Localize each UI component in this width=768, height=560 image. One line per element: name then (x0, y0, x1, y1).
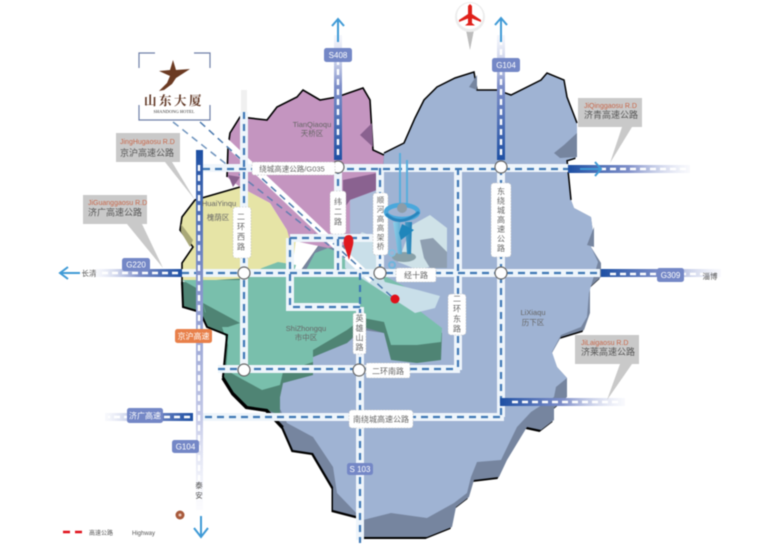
badge: Jiguang expressway (127, 408, 163, 423)
callout: Jiqing: JiQinggaosu R.D (584, 103, 637, 110)
Shizhong outline (182, 282, 283, 427)
Huaiyin shaded corner (181, 224, 193, 247)
callout: Jinghu: JingHugaosu R.D (120, 139, 175, 146)
highway: G309 east (601, 269, 721, 277)
callout: Jiqing: 济青高速公路 (584, 109, 638, 120)
logo: Shandong Hotel (139, 53, 210, 120)
district label: Tianqiao: 天桥区 (301, 128, 324, 138)
Lixia shaded corners (469, 75, 594, 247)
legend (63, 529, 155, 537)
district map (180, 72, 601, 539)
callout: Jinghu: 京沪高速公路 (120, 147, 174, 158)
badge: S408 (324, 48, 352, 62)
road label: Wei 2 Road: 纬二路 (334, 197, 342, 228)
highway: G104 north (497, 35, 505, 160)
district: Lixia surface (277, 72, 598, 520)
road label: South ring expressway: 南绕城高速公路 (353, 414, 409, 424)
district label: Shizhong: 市中区 (295, 332, 318, 342)
place label: Tai'an: 安 (195, 490, 203, 500)
central light zone (345, 232, 440, 313)
callout: Jilai (575, 335, 639, 400)
arrow: south Tai'an (194, 516, 208, 537)
district: Shizhong surface (182, 248, 442, 390)
callout: Jiguang: 济广高速公路 (88, 206, 142, 218)
arrow: north G104 (495, 18, 507, 42)
place label: Tai'an: 泰 (195, 480, 203, 490)
district: Lixia base (222, 74, 600, 539)
badge: Jinghu expressway (175, 329, 212, 343)
icon: airport pin (455, 2, 485, 50)
white diagonal approach band (173, 122, 392, 297)
Yellow hump patch (262, 262, 296, 285)
legend: 高速公路 (89, 529, 113, 537)
road label: Raocheng G035 (252, 162, 335, 175)
road label: Jingshi Road: 经十路 (404, 270, 428, 280)
district: Lixia side (223, 72, 601, 537)
callout: Jinghu (116, 133, 195, 200)
badge: Jinghu expressway: 京沪高速 (178, 331, 210, 341)
highway: Jinghu (196, 150, 203, 510)
district label: Tianqiao (293, 120, 331, 138)
badge: S103 (347, 463, 373, 475)
legend: Highway (132, 531, 155, 537)
badge: Jiguang expressway: 济广高速 (129, 410, 161, 420)
badge: G104 south: G104 (176, 442, 196, 452)
road label: Yingxiongshan Road: 英雄山路 (355, 313, 364, 353)
road label: Yingxiongshan Road (353, 313, 366, 354)
Tianqiao outline (227, 88, 384, 177)
road label: Wei 2 Road (330, 191, 346, 234)
logo: Shandong Hotel: 山东大厦 (144, 93, 204, 108)
callout: Jilai: 济莱高速公路 (581, 346, 635, 357)
logo: Shandong Hotel: SHANDONG HOTEL (153, 109, 195, 114)
place label: Tai'an (195, 480, 203, 500)
highway: Jiqing east (568, 165, 690, 173)
road label: South 2nd Ring: 二环南路 (372, 366, 404, 376)
badge: G309: G309 (661, 271, 681, 280)
road label: South 2nd Ring (366, 363, 410, 378)
badge: G104 north (492, 58, 520, 72)
district label: Huaiyin: 槐荫区 (207, 212, 230, 222)
callout: Jiguang: JiGuanggaosu R.D (88, 200, 147, 207)
district label: Lixia (520, 308, 546, 327)
road label: Raocheng G035: 绕城高速公路/G035 (259, 164, 325, 174)
road label: East 2nd Ring: 二环东路 (452, 294, 462, 334)
district label: Shizhong: ShiZhongqu (286, 324, 326, 333)
district label: Lixia: LiXiaqu (520, 308, 546, 317)
icon: hotel location pin (344, 235, 353, 260)
badge: G104 north: G104 (496, 61, 516, 70)
icon: TV tower (386, 153, 419, 268)
badge: S408: S408 (329, 51, 348, 60)
road label: East ring expressway (491, 183, 511, 257)
badge: G220: G220 (126, 260, 146, 270)
place label: Changqing: 长清 (82, 268, 97, 278)
callout: Jilai: JiLaigaosu R.D (581, 340, 628, 347)
badge: S103: S 103 (350, 465, 371, 474)
district: Tianqiao (227, 88, 384, 248)
icon: brown marker (176, 510, 184, 520)
arrow: east Jiqing (580, 162, 601, 176)
Huaiyin outline (180, 187, 240, 285)
tower surroundings (398, 215, 447, 270)
badge: G220 (122, 258, 150, 271)
highway: S408 (334, 35, 342, 160)
place label: Zibo: 淄博 (702, 271, 718, 281)
arrow: north S408 (332, 19, 344, 42)
road label: South ring expressway (349, 410, 413, 428)
road label: West 2nd Ring: 二环西路 (236, 212, 246, 252)
highway: G220 west (95, 269, 182, 277)
junction circles (238, 161, 507, 376)
road label: Jingshi Road (396, 268, 436, 282)
road label: elevated bridge: 顺河高高架桥 (376, 196, 385, 252)
tower shadow (420, 238, 447, 268)
badge: G309 (657, 268, 684, 282)
highway: Jilai east (500, 398, 625, 406)
district label: Shizhong (286, 324, 326, 342)
arrow: west Changqing (60, 267, 80, 279)
district label: Lixia: 历下区 (522, 318, 545, 327)
road label: elevated bridge (373, 193, 388, 255)
district label: Tianqiao: TianQiaoqu (293, 120, 331, 129)
road label: West 2nd Ring (233, 207, 251, 258)
road label: East ring expressway: 东绕城高速公路 (496, 186, 506, 253)
road network (182, 90, 600, 543)
district: Huaiyin (180, 187, 296, 285)
Shizhong dark notch (203, 303, 240, 327)
district: Shizhong base (182, 270, 442, 415)
district label: Huaiyin (202, 199, 236, 222)
highway: Jiguang west (105, 413, 193, 421)
Tianqiao shaded areas (228, 123, 377, 210)
slate zone (350, 190, 377, 240)
callout: Jiqing (578, 98, 642, 163)
Lixia north outline (384, 72, 577, 200)
callout: Jiguang (83, 195, 163, 268)
road label: East 2nd Ring (448, 294, 466, 335)
icon: red dot destination (390, 294, 400, 304)
badge: G104 south (172, 440, 199, 453)
district label: Huaiyin: HuaiYinqu (202, 199, 236, 208)
